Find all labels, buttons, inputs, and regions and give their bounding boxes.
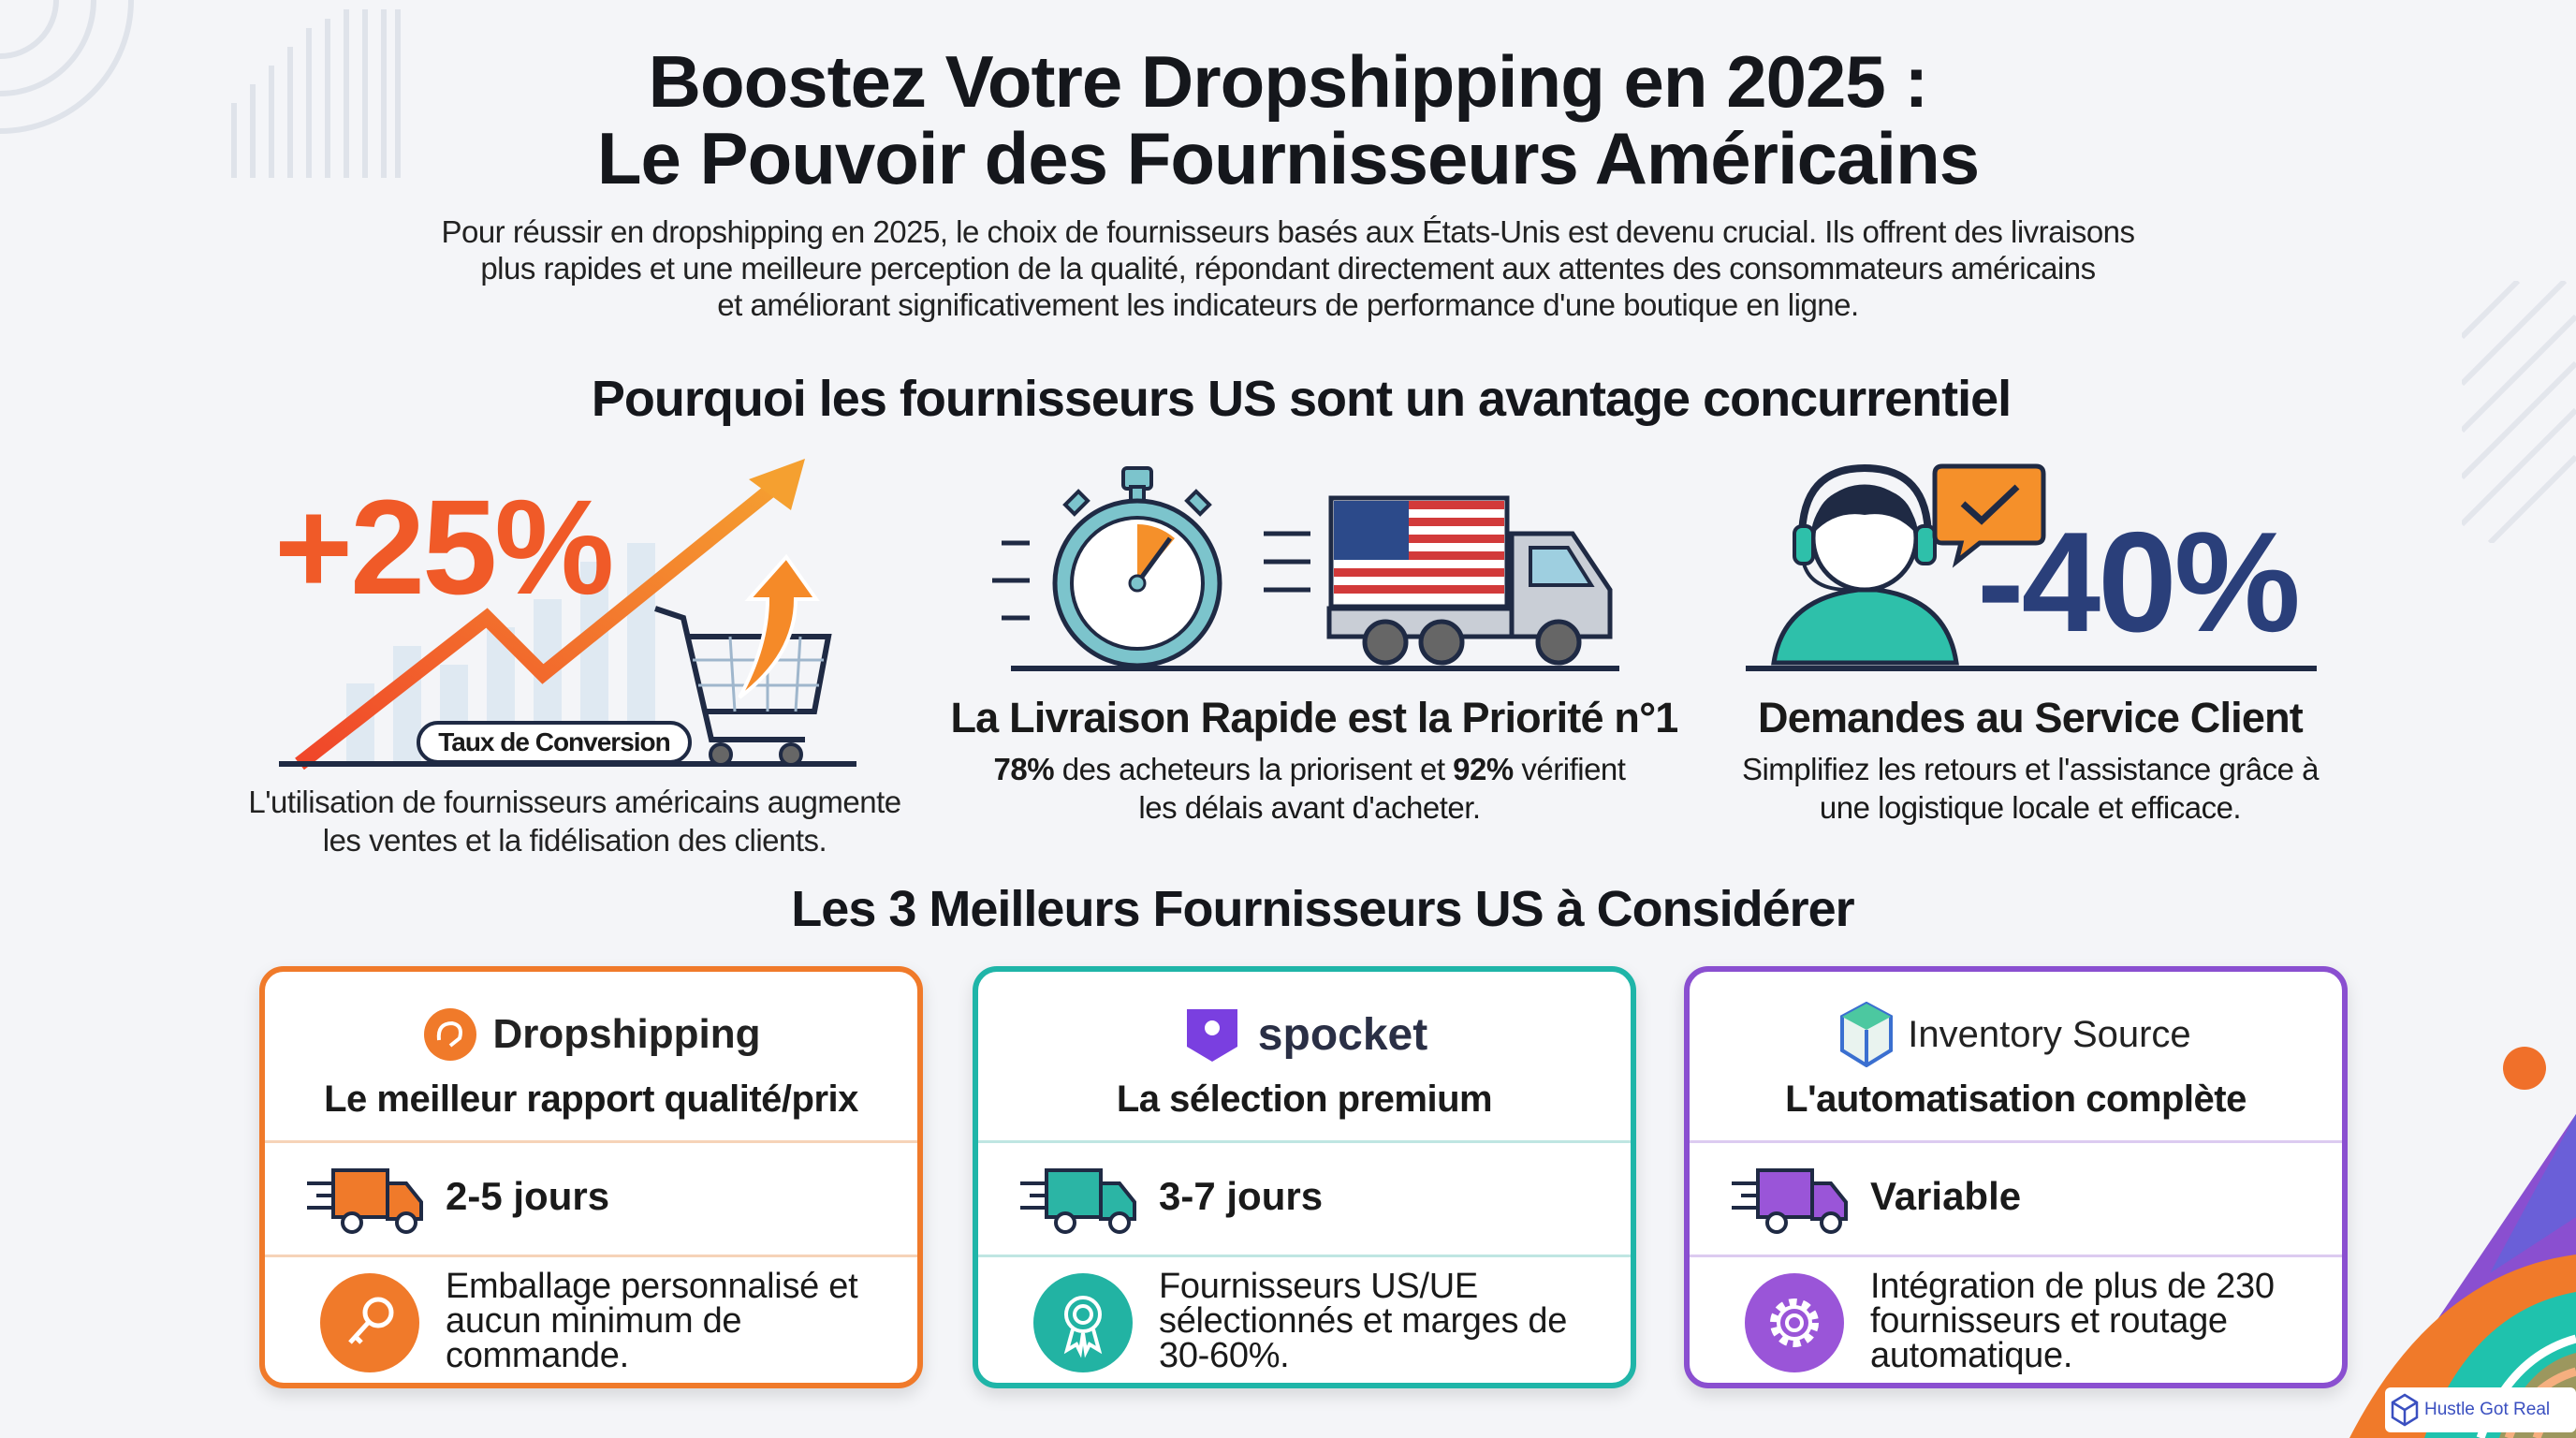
truck with flag bbox=[1264, 498, 1610, 663]
intro paragraph bbox=[441, 214, 2135, 322]
icon: gear bbox=[1745, 1273, 1844, 1372]
logo: dropshipping: Dropshipping bbox=[493, 1011, 760, 1057]
text: feature bbox=[1159, 1267, 1567, 1375]
panel: customer service icon bbox=[1746, 464, 2317, 671]
text: feature bbox=[1870, 1267, 2275, 1375]
panel: card Inventory Source bbox=[1684, 966, 2348, 1388]
section heading: top suppliers: Les 3 Meilleurs Fournisseurs US à Considérer bbox=[791, 881, 1854, 937]
text: fast delivery stats bbox=[994, 752, 1626, 825]
text: feature: sélectionnés et marges de bbox=[1159, 1301, 1567, 1341]
subtitle: Le meilleur rapport qualité/prix bbox=[324, 1078, 858, 1120]
caption: conversion: les ventes et la fidélisation des clients. bbox=[323, 823, 827, 858]
stopwatch bbox=[992, 468, 1619, 668]
text: customer service: une logistique locale et efficace. bbox=[1820, 790, 2241, 825]
heading: customer service: Demandes au Service Client bbox=[1758, 694, 2303, 741]
intro paragraph: et améliorant significativement les indicateurs de performance d'une boutique en ligne. bbox=[717, 287, 1859, 322]
logo: inventory source bbox=[1840, 1002, 2191, 1067]
intro paragraph: plus rapides et une meilleure perception de la qualité, répondant directement aux attentes des consommateurs américains bbox=[480, 251, 2096, 286]
panel: fast delivery icons bbox=[992, 466, 1619, 671]
text: feature: commande. bbox=[446, 1336, 629, 1375]
section heading: advantages: Pourquoi les fournisseurs US sont un avantage concurrentiel bbox=[592, 371, 2011, 427]
label pill: taux de conversion: Taux de Conversion bbox=[438, 727, 670, 756]
text: fast delivery stats: les délais avant d'acheter. bbox=[1138, 790, 1481, 825]
icon: truck purple bbox=[1732, 1168, 1848, 1234]
text: feature: Fournisseurs US/UE bbox=[1159, 1267, 1478, 1306]
text: delivery time: Variable bbox=[1870, 1174, 2021, 1218]
logo: dropshipping bbox=[424, 1008, 760, 1061]
logo: spocket: spocket bbox=[1258, 1009, 1427, 1060]
subtitle: L'automatisation complète bbox=[1785, 1078, 2247, 1120]
text: feature: aucun minimum de bbox=[446, 1301, 741, 1341]
intro paragraph: Pour réussir en dropshipping en 2025, le choix de fournisseurs basés aux États-Unis est devenu crucial. Ils offrent des livraisons bbox=[441, 214, 2135, 249]
text: feature bbox=[446, 1267, 857, 1375]
title: Le Pouvoir des Fournisseurs Américains bbox=[597, 117, 1979, 199]
stat: +25%: +25% bbox=[274, 472, 611, 623]
panel: card Spocket bbox=[973, 966, 1636, 1388]
title: Boostez Votre Dropshipping en 2025 : bbox=[649, 40, 1927, 123]
title bbox=[597, 40, 1979, 199]
text: feature: Emballage personnalisé et bbox=[446, 1267, 857, 1306]
logo: inventory source: Inventory Source bbox=[1908, 1013, 2191, 1054]
icon: award bbox=[1033, 1273, 1133, 1372]
text: customer service: Simplifiez les retours et l'assistance grâce à bbox=[1742, 752, 2319, 786]
text: customer service bbox=[1742, 752, 2320, 825]
decoration: orange dot bbox=[2503, 1047, 2546, 1090]
decoration: bottom-right shapes bbox=[2349, 1114, 2576, 1438]
watermark: Hustle Got Real bbox=[2424, 1400, 2550, 1419]
heading: fast delivery: La Livraison Rapide est la Priorité n°1 bbox=[950, 694, 1678, 741]
text: feature: fournisseurs et routage bbox=[1870, 1301, 2228, 1341]
text: feature: 30-60%. bbox=[1159, 1336, 1289, 1375]
stat: -40%: -40% bbox=[1977, 503, 2298, 662]
decoration: right stripes bbox=[2462, 281, 2576, 543]
label pill: taux de conversion bbox=[417, 721, 692, 764]
panel: card Dropshipping bbox=[259, 966, 923, 1388]
caption: conversion: L'utilisation de fournisseurs américains augmente bbox=[248, 785, 901, 819]
panel: conversion bbox=[274, 459, 856, 770]
subtitle: La sélection premium bbox=[1117, 1078, 1492, 1120]
icon: truck teal bbox=[1020, 1168, 1136, 1234]
text: feature: automatique. bbox=[1870, 1336, 2072, 1375]
logo: spocket bbox=[1187, 1009, 1427, 1062]
decoration: top-left arcs bbox=[0, 0, 401, 178]
icon: truck orange bbox=[307, 1168, 423, 1234]
text: delivery time: 2-5 jours bbox=[446, 1174, 609, 1218]
chart: growth arrow with cart bbox=[279, 459, 856, 770]
icon: key bbox=[320, 1273, 419, 1372]
text: fast delivery stats: 78% des acheteurs la priorisent et 92% vérifient bbox=[994, 752, 1625, 786]
text: feature: Intégration de plus de 230 bbox=[1870, 1267, 2275, 1306]
text: delivery time: 3-7 jours bbox=[1159, 1174, 1323, 1218]
caption: conversion bbox=[248, 785, 901, 858]
watermark bbox=[2385, 1387, 2576, 1432]
